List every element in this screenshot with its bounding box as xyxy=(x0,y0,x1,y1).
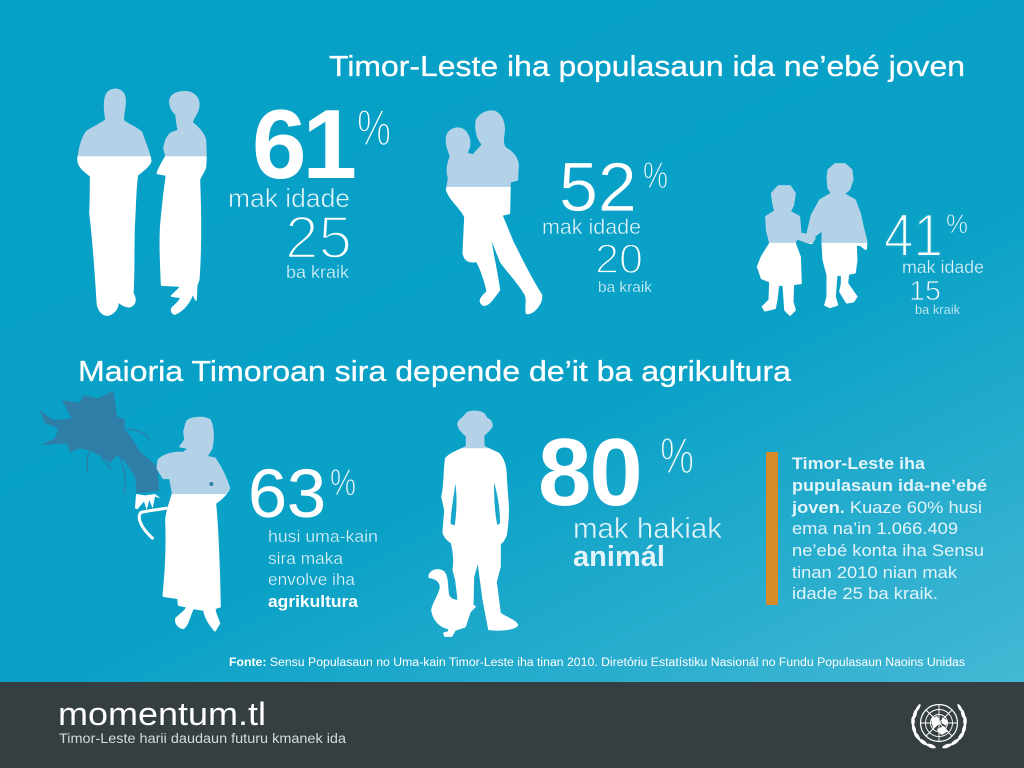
stat: 52 percent: mak idade xyxy=(542,216,641,239)
stat: 52 percent: 20 xyxy=(595,235,643,282)
stat: 80 percent: 80 xyxy=(538,419,641,526)
footer: tagline: Timor-Leste harii daudaun futuru kmanek ida xyxy=(59,731,347,746)
stat: 63 percent xyxy=(248,455,378,611)
icon: UN emblem xyxy=(911,703,967,749)
icon: man with hat and goose xyxy=(429,411,517,636)
icon: woman with sickle and harvested plant xyxy=(39,391,229,631)
heading: young population: Timor-Leste iha populasaun ida ne’ebé joven xyxy=(329,51,965,83)
stat: 52 percent: ba kraik xyxy=(598,279,653,296)
text block: summary: ema na’in 1.066.409 xyxy=(792,519,958,538)
stat: 41 percent xyxy=(884,202,984,317)
stat: 63 percent: % xyxy=(330,462,356,504)
stat: 63 percent: 63 xyxy=(248,455,326,532)
stat: 41 percent: 15 xyxy=(909,275,941,306)
stat: 61 percent: mak idade xyxy=(228,183,350,213)
stat: 52 percent: 52 xyxy=(559,148,637,226)
source note: Fonte: Sensu Populasaun no Uma-kain Timor-Leste iha tinan 2010. Diretóriu Estatístiku Nasionál no Fundu Populasaun Naoins Unidas xyxy=(229,657,965,669)
orange accent bar xyxy=(766,452,778,605)
stat: 41 percent: 41 xyxy=(884,202,943,269)
stat: 61 percent: ba kraik xyxy=(286,262,349,282)
icon: woman silhouette xyxy=(157,418,229,631)
text block: summary: tinan 2010 nian mak xyxy=(792,563,958,582)
stat: 63 percent: agrikultura xyxy=(268,592,359,611)
icon: grain and sickle xyxy=(135,494,161,510)
stat: 63 percent: sira maka xyxy=(268,549,344,568)
stat: 80 percent: % xyxy=(660,427,694,484)
stat: 61 percent: % xyxy=(357,99,391,156)
icon: plant bundle xyxy=(39,391,159,494)
footer band xyxy=(0,682,1024,768)
stat: 63 percent: husi uma-kain xyxy=(268,527,378,546)
text block: summary: pupulasaun ida-ne’ebé xyxy=(792,476,987,495)
stat: 80 percent xyxy=(538,419,723,573)
stat: 61 percent xyxy=(228,89,391,282)
text block: summary: Timor-Leste iha xyxy=(792,454,926,473)
text block: summary xyxy=(791,454,987,603)
text block: summary: joven. Kuaze 60% husi xyxy=(791,498,982,517)
heading: agriculture: Maioria Timoroan sira depende de’it ba agrikultura xyxy=(78,356,792,388)
stat: 41 percent: ba kraik xyxy=(915,302,960,317)
stat: 61 percent: 61 xyxy=(252,89,355,199)
stat: 61 percent: 25 xyxy=(285,204,352,271)
stat: 63 percent: envolve iha xyxy=(268,570,356,589)
stat: 41 percent: % xyxy=(946,209,968,239)
stat: 52 percent: % xyxy=(643,155,668,196)
text block: summary: ne’ebé konta iha Sensu xyxy=(792,541,984,560)
icon: adult couple silhouettes xyxy=(78,89,206,315)
icon: two children holding hands xyxy=(758,164,867,315)
stat: 80 percent: mak hakiak xyxy=(573,513,723,545)
footer: brand name: momentum.tl xyxy=(58,696,266,732)
stat: 52 percent xyxy=(542,148,668,296)
stat: 41 percent: mak idade xyxy=(902,257,984,277)
text block: summary: idade 25 ba kraik. xyxy=(792,584,938,603)
icon: youth carrying child silhouette xyxy=(447,111,541,313)
stat: 80 percent: animál xyxy=(573,541,665,573)
